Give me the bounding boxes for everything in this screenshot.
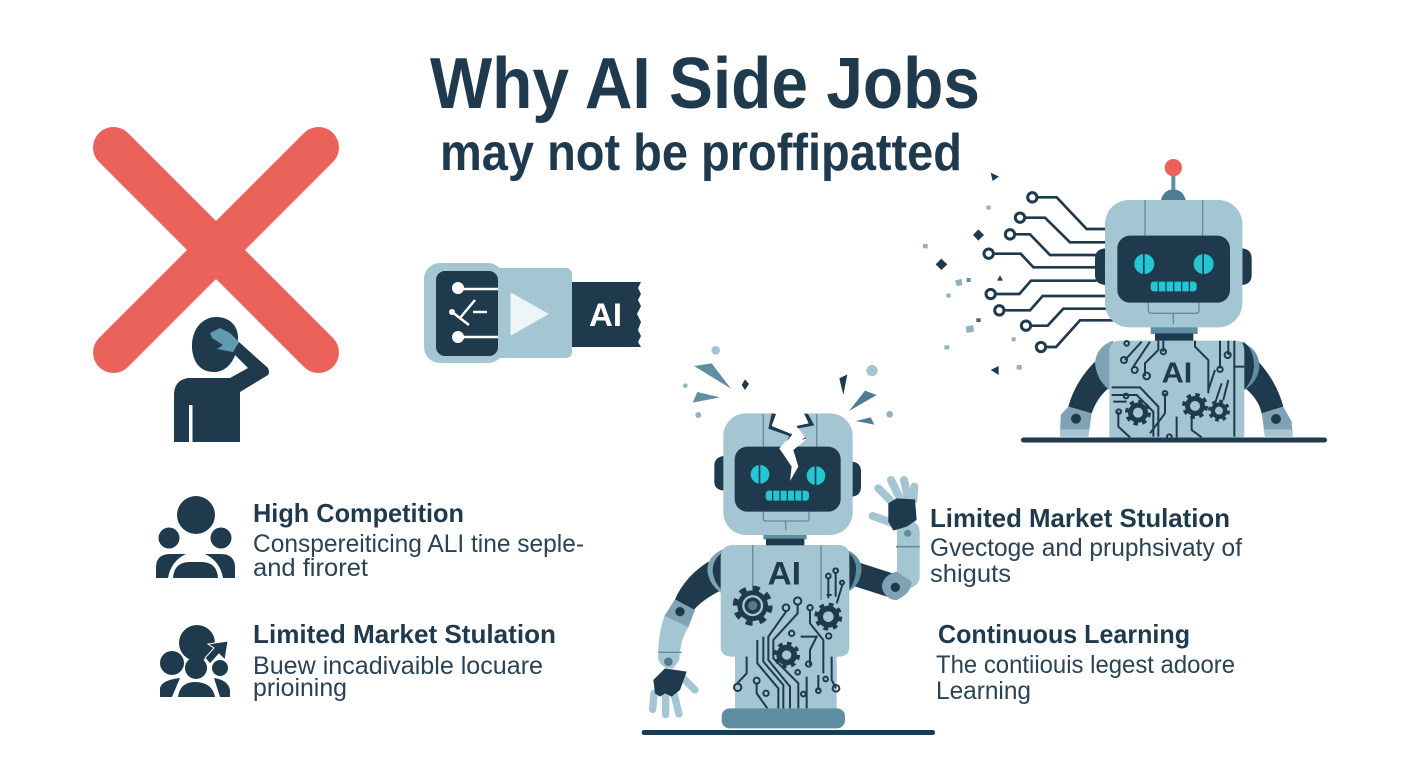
icon: video AI tag xyxy=(424,263,641,363)
icon: confused person xyxy=(174,317,269,442)
circuit lines xyxy=(984,193,1118,352)
base xyxy=(722,708,845,728)
baseline: upper robot xyxy=(1021,438,1327,442)
icon: video AI tag: AI xyxy=(589,297,622,333)
robot: intact with circuit lines xyxy=(923,159,1293,439)
torso xyxy=(1109,341,1244,437)
lower body xyxy=(735,653,837,710)
flying shards xyxy=(683,346,893,425)
title: Why AI Side Jobs xyxy=(430,44,980,124)
text: limited market right: Gvectoge and pruphsivaty of xyxy=(930,534,1242,562)
icon: group of people xyxy=(156,496,235,578)
torso AI label: AI xyxy=(1162,358,1192,390)
left arm xyxy=(653,547,730,715)
text: limited market left xyxy=(253,619,556,702)
text: continuous learning xyxy=(936,619,1235,705)
item: high competition xyxy=(156,496,584,582)
text: limited market right xyxy=(930,503,1242,588)
torso xyxy=(721,545,849,657)
torso circuits xyxy=(1112,341,1244,439)
item: limited market left xyxy=(160,619,556,702)
text: high competition: and firoret xyxy=(253,554,368,582)
head crack xyxy=(768,413,814,481)
icon: red cross xyxy=(114,148,318,352)
gears xyxy=(736,589,840,666)
text: high competition: High Competition xyxy=(253,498,464,528)
head xyxy=(723,413,853,535)
face screen xyxy=(1117,236,1230,303)
arms xyxy=(1060,341,1293,437)
text: high competition xyxy=(253,498,584,582)
gears xyxy=(1127,395,1228,424)
right arm xyxy=(843,480,920,600)
robot: broken xyxy=(642,346,935,735)
eyes and mouth xyxy=(1134,253,1214,291)
text: continuous learning: The contiiouis legest adoore xyxy=(936,651,1235,679)
head xyxy=(1105,200,1242,327)
baseline xyxy=(642,730,935,735)
text: limited market left: Buew incadivaible locuare xyxy=(253,652,543,680)
title: may not be proffipatted xyxy=(440,124,962,182)
text: high competition: Conspereiticing ALI tine seple- xyxy=(253,530,584,558)
torso AI label: AI xyxy=(768,555,801,591)
eyes and mouth xyxy=(751,464,825,501)
text: continuous learning: Continuous Learning xyxy=(938,619,1190,649)
text: limited market right: shiguts xyxy=(930,560,1011,588)
face screen xyxy=(735,447,841,512)
icon: people with arrow xyxy=(160,625,230,697)
antenna xyxy=(1161,159,1186,200)
neck xyxy=(1151,327,1198,341)
text: limited market left: prioining xyxy=(253,674,347,702)
text: continuous learning: Learning xyxy=(936,677,1031,705)
circuit traces xyxy=(734,568,844,708)
title xyxy=(430,44,980,182)
text: limited market left: Limited Market Stulation xyxy=(253,619,556,649)
text: limited market right: Limited Market Stulation xyxy=(930,503,1230,533)
ears xyxy=(1095,248,1252,285)
debris particles xyxy=(923,173,1022,375)
neck xyxy=(763,533,807,545)
ears xyxy=(714,456,861,497)
